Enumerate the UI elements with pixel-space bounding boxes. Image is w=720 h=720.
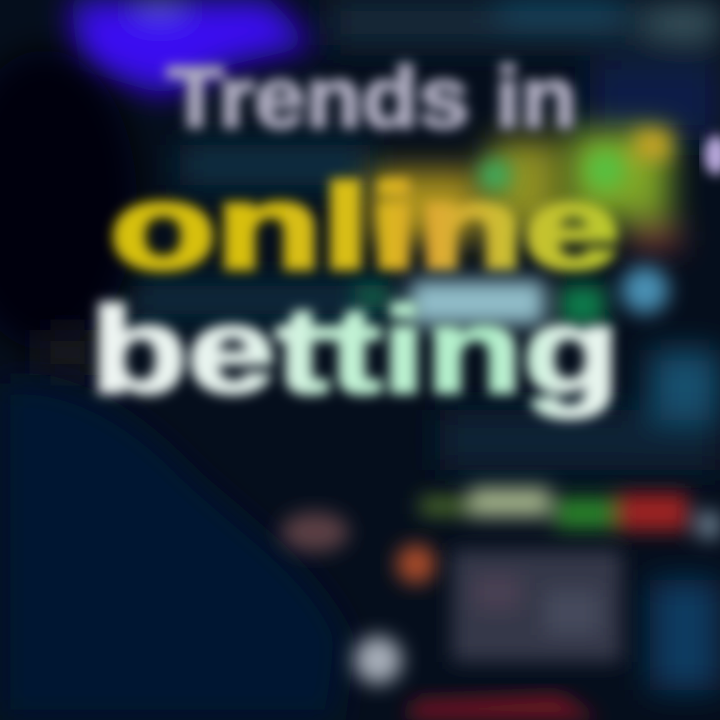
person: head silhouette: [0, 50, 137, 350]
white light: [354, 636, 402, 684]
title line: Trends in: Trends in: [167, 50, 577, 146]
orange light: [396, 544, 436, 584]
title line: betting: betting: [90, 282, 620, 418]
side screen accent: [704, 135, 720, 175]
person: neck: [40, 330, 95, 375]
monitor panel: [452, 550, 622, 662]
green highlights over online: [479, 130, 670, 191]
blue-violet glow, top left: [70, 0, 315, 95]
person: shoulders and torso: [0, 383, 345, 720]
background screen lights: [130, 0, 720, 690]
red console strip: [405, 694, 600, 720]
color blocks behind the word online: [370, 130, 680, 247]
colored ticker bar: [420, 487, 720, 538]
title line: online: online: [110, 160, 620, 294]
hand: [281, 512, 349, 552]
color blocks behind the word betting: [355, 266, 669, 325]
